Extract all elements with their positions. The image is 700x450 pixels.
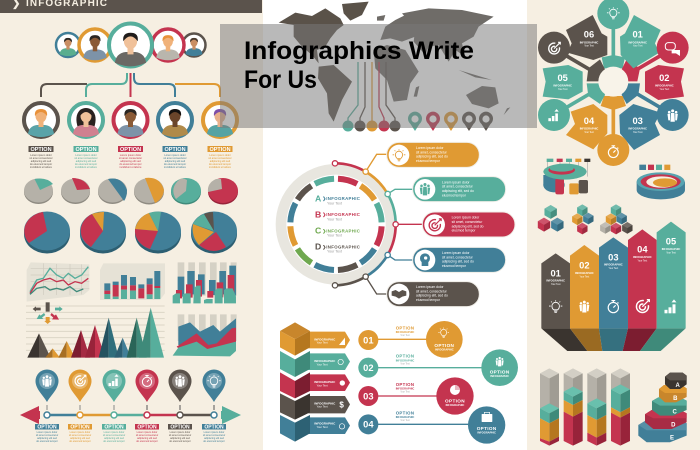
portrait: orange ring — [203, 103, 237, 137]
petal 05 — [543, 65, 583, 99]
option 02: INFOGRAPHIC — [490, 374, 509, 378]
option labels row: OPTION — [75, 147, 97, 153]
option labels row: incididunt ut labore — [75, 165, 97, 169]
option 02: INFOGRAPHIC — [396, 358, 414, 362]
option labels row: Lorem ipsum dolor — [164, 153, 186, 157]
option 04 — [358, 406, 505, 444]
column two — [564, 368, 583, 446]
pill: red target: eiusmod tempor — [452, 229, 476, 233]
column 05: 05 — [666, 236, 676, 246]
timeline option labels: Lorem ipsum dolor — [70, 431, 91, 434]
petal 05: INFOGRAPHIC — [553, 84, 572, 88]
option labels row: adipiscing elit sed — [210, 159, 231, 163]
option 04: INFOGRAPHIC — [477, 430, 496, 434]
column 05: INFOGRAPHIC — [662, 247, 680, 251]
pill: blue head gear — [413, 247, 506, 272]
column 04: Your Text — [638, 259, 647, 262]
pill: teal people: Lorem ipsum dolor — [442, 180, 470, 184]
arrow tab: dark: $ — [339, 400, 344, 409]
timeline option labels: adipiscing elit sed — [204, 437, 224, 440]
title overlay banner — [220, 24, 537, 128]
pill: blue head gear: adipiscing elit, sed do — [442, 260, 474, 264]
petal 02 — [645, 65, 684, 100]
timeline option labels: Lorem ipsum dolor — [37, 431, 58, 434]
centre labels A-D: C — [315, 226, 322, 236]
petal 06: INFOGRAPHIC — [580, 40, 598, 44]
option labels row: do eiusmod tempor — [30, 162, 52, 166]
arrow tab: orange: INFOGRAPHIC — [314, 337, 336, 341]
arc nodes — [332, 161, 398, 288]
option labels row: OPTION — [209, 147, 231, 153]
pill: orange bulb: sit amet, consectetur — [416, 150, 448, 154]
option labels row: incididunt ut labore — [120, 165, 142, 169]
column 01: 01 — [550, 268, 561, 278]
petal 04: Your Text — [584, 131, 594, 134]
column four — [611, 368, 630, 446]
option labels row: do eiusmod tempor — [209, 162, 231, 166]
option labels row — [28, 146, 232, 169]
option labels row: OPTION — [30, 147, 52, 153]
org chart connectors — [41, 73, 220, 97]
column 03: 03 — [608, 252, 619, 262]
option labels row: sit amet consectetur — [74, 156, 98, 160]
column 01: INFOGRAPHIC — [546, 279, 565, 283]
option 04: 04 — [363, 420, 374, 430]
pill: red target: sit amet, consectetur — [452, 220, 483, 224]
centre labels A-D: Your Text — [327, 201, 342, 205]
stacked bar chart — [100, 263, 165, 300]
map connector lines — [348, 62, 395, 124]
pill: teal people — [413, 177, 506, 202]
option labels row: incididunt ut labore — [209, 165, 231, 169]
centre labels A-D: Your Text — [327, 250, 342, 254]
timeline option labels: adipiscing elit sed — [70, 437, 90, 440]
petal 01 — [620, 15, 661, 68]
timeline option labels: do eiusmod tempor — [136, 440, 158, 443]
portrait: dark ring — [24, 103, 58, 137]
arrow tab: red — [308, 374, 350, 391]
arrow tab: orange: Your Text — [317, 341, 328, 345]
cube stack with options — [280, 321, 518, 444]
option labels row: adipiscing elit sed — [31, 159, 52, 163]
option 03: INFOGRAPHIC — [396, 387, 414, 391]
arrow tab: dark: INFOGRAPHIC — [314, 401, 336, 405]
option labels row: OPTION — [120, 147, 141, 153]
option labels row: incididunt ut labore — [164, 165, 186, 169]
petal 01: 01 — [632, 30, 643, 40]
centre labels A-D: ❯INFOGRAPHIC — [322, 228, 360, 234]
outer coloured arcs — [335, 163, 396, 285]
map hexagon markers — [342, 120, 400, 132]
centre labels A-D: B — [315, 209, 321, 219]
timeline option labels: do eiusmod tempor — [103, 440, 125, 443]
petal 06: 06 — [584, 30, 594, 40]
column base perspective — [541, 328, 686, 351]
pill: teal people: sit amet, consectetur — [442, 185, 474, 189]
timeline option labels: OPTION — [204, 424, 224, 430]
map pins — [408, 112, 493, 131]
3D ring chart left — [543, 159, 590, 194]
option labels row: Lorem ipsum dolor — [120, 153, 141, 157]
petal 01: Your Text — [633, 45, 643, 48]
pill: orange bulb: adipiscing elit, sed do — [416, 155, 448, 159]
layer B: B — [673, 396, 678, 402]
petal 04: 04 — [584, 116, 595, 126]
timeline option labels: do eiusmod tempor — [69, 440, 91, 443]
option 02: Your Text — [400, 362, 410, 365]
option 01: Your Text — [400, 334, 410, 337]
small arrows cluster — [33, 302, 63, 324]
arrow tab: teal: INFOGRAPHIC — [314, 359, 336, 363]
pill: orange bulb: Lorem ipsum dolor — [416, 146, 444, 150]
timeline option labels: do eiusmod tempor — [169, 440, 191, 443]
world map — [279, 2, 510, 122]
hexagon flower diagram — [538, 0, 689, 199]
flower stems — [565, 27, 662, 137]
option labels row: sit amet consectetur — [119, 156, 142, 160]
arrow tab: red: Your Text — [317, 383, 328, 387]
arrow tab: dark — [308, 396, 350, 413]
option 01: OPTION — [396, 325, 414, 330]
connector lines to pills — [366, 154, 422, 294]
arrow tab: teal — [308, 353, 350, 370]
option 04: INFOGRAPHIC — [396, 415, 414, 419]
pill: blue head gear: sit amet, consectetur — [442, 255, 474, 259]
timeline option labels: adipiscing elit sed — [104, 437, 124, 440]
centre labels A-D: Your Text — [327, 217, 342, 221]
option labels row: sit amet consectetur — [29, 156, 53, 160]
timeline option labels: Lorem ipsum dolor — [137, 431, 158, 434]
pill: blue head gear: Lorem ipsum dolor — [442, 251, 470, 255]
timeline option labels: sit amet consectetur — [203, 434, 225, 437]
timeline option labels: sit amet consectetur — [36, 434, 58, 437]
option labels row: OPTION — [164, 147, 186, 153]
option 04: OPTION — [477, 426, 497, 431]
timeline option labels: adipiscing elit sed — [137, 437, 157, 440]
petal 06 — [566, 15, 607, 60]
option 02 — [358, 349, 518, 386]
option 04: Your Text — [400, 419, 410, 422]
option 03: INFOGRAPHIC — [446, 403, 464, 407]
outer icon circles — [538, 0, 689, 166]
centre circle — [598, 67, 628, 97]
centre labels A-D: Your Text — [327, 234, 342, 238]
option 02: OPTION — [396, 354, 414, 359]
option 02: OPTION — [490, 370, 510, 375]
pill: dark handshake: adipiscing elit, sed do — [416, 294, 448, 298]
title: Infographics Write — [244, 37, 474, 65]
centre labels A-D: ❯INFOGRAPHIC — [322, 244, 360, 250]
circular diagram — [273, 142, 515, 307]
arrow tab: dark: Your Text — [317, 405, 328, 409]
petal 05: 05 — [557, 73, 568, 83]
column 04 — [628, 229, 657, 328]
portrait: red ring — [114, 103, 148, 137]
column 05 — [657, 222, 686, 328]
option labels row: incididunt ut labore — [30, 165, 52, 169]
column 04: INFOGRAPHIC — [633, 255, 652, 259]
pill: dark handshake: Lorem ipsum dolor — [416, 285, 444, 289]
option labels row: Lorem ipsum dolor — [209, 153, 231, 157]
option 01: INFOGRAPHIC — [435, 347, 454, 351]
centre labels A-D — [315, 193, 360, 254]
arrow tab: red: INFOGRAPHIC — [314, 380, 336, 384]
cube clusters — [538, 204, 633, 234]
line chart — [27, 262, 89, 302]
option 03: OPTION — [396, 382, 414, 387]
mountain peak chart — [26, 306, 165, 358]
arrow tab: orange — [308, 332, 350, 348]
column 02: INFOGRAPHIC — [575, 271, 594, 275]
timeline option labels: sit amet consectetur — [136, 434, 158, 437]
option 01 — [358, 321, 463, 358]
option 04: OPTION — [396, 410, 414, 415]
layer C: C — [672, 409, 677, 415]
pill: red target: Lorem ipsum dolor — [452, 216, 480, 220]
option 03: Your Text — [400, 391, 410, 394]
small pie charts row — [24, 178, 238, 204]
column 02: 02 — [579, 260, 590, 270]
option labels row: sit amet consectetur — [208, 156, 232, 160]
petal 02: 02 — [659, 73, 670, 83]
timeline option labels: OPTION — [104, 424, 124, 430]
panel: centre white column — [263, 0, 527, 450]
option 01: 01 — [363, 335, 374, 345]
petal 04: INFOGRAPHIC — [580, 127, 598, 131]
timeline option labels: sit amet consectetur — [69, 434, 91, 437]
pill: dark handshake: sit amet, consectetur — [416, 289, 448, 293]
pill: dark handshake: eiusmod tempor — [416, 298, 441, 302]
petal 03: 03 — [632, 116, 643, 126]
option 01: INFOGRAPHIC — [396, 330, 414, 334]
large pie charts row — [24, 212, 237, 254]
column 03 — [599, 237, 628, 328]
3D bar chart — [173, 262, 237, 303]
timeline option labels: do eiusmod tempor — [36, 440, 58, 443]
petal 03: Your Text — [633, 131, 643, 134]
centre labels A-D: D — [315, 242, 321, 252]
option labels row: sit amet consectetur — [163, 156, 187, 160]
option 01: OPTION — [434, 343, 455, 348]
pill: red target: adipiscing elit, sed do — [452, 224, 484, 228]
inner dashed ring — [273, 161, 399, 287]
pill: orange bulb — [387, 142, 479, 167]
pill: teal people: adipiscing elit, sed do — [442, 189, 474, 193]
column 05: Your Text — [666, 251, 676, 254]
portrait: teal ring — [69, 103, 103, 137]
panel: right column — [538, 0, 689, 446]
petal 03: INFOGRAPHIC — [628, 127, 647, 131]
option labels row: adipiscing elit sed — [120, 159, 141, 163]
column 02 — [570, 245, 599, 328]
option labels row: adipiscing elit sed — [76, 159, 97, 163]
timeline option labels: OPTION — [37, 424, 57, 430]
timeline option labels: do eiusmod tempor — [203, 440, 225, 443]
column 02: Your Text — [580, 275, 589, 278]
option labels row: do eiusmod tempor — [119, 162, 142, 166]
petal 05: Your Text — [558, 88, 568, 91]
petal 04 — [566, 104, 607, 149]
centre labels A-D: ❯INFOGRAPHIC — [322, 196, 360, 202]
layer E: E — [670, 436, 674, 442]
pill: dark handshake — [387, 282, 479, 307]
arrow tab: blue — [308, 417, 350, 434]
arrow tab: blue: Your Text — [317, 425, 328, 429]
isometric stacked columns — [540, 368, 630, 446]
option 03: 03 — [363, 391, 374, 401]
option labels row: Lorem ipsum dolor — [75, 153, 97, 157]
timeline option labels — [35, 424, 226, 443]
centre labels A-D: ❯INFOGRAPHIC — [322, 212, 360, 218]
option labels row: Lorem ipsum dolor — [30, 153, 52, 157]
layer D: D — [671, 422, 676, 428]
pill: blue head gear: eiusmod tempor — [442, 264, 467, 268]
timeline arrows and nodes — [20, 405, 241, 424]
petal 02: Your Text — [660, 88, 669, 91]
pill: red target — [422, 212, 515, 237]
column 03: INFOGRAPHIC — [604, 263, 623, 267]
petal 06: Your Text — [584, 45, 594, 48]
column 04: 04 — [637, 244, 648, 254]
timeline option labels: sit amet consectetur — [169, 434, 191, 437]
petal 01: INFOGRAPHIC — [628, 40, 647, 44]
option 02: 02 — [363, 363, 374, 373]
centre labels A-D: A — [315, 193, 322, 203]
layer A: A — [675, 383, 680, 389]
title: For Us — [244, 66, 317, 94]
column 01: Your Text — [551, 283, 561, 286]
inner ring segments — [587, 55, 640, 110]
timeline option labels: OPTION — [170, 424, 190, 430]
column one — [540, 368, 559, 446]
arrow tab: teal: Your Text — [317, 362, 328, 366]
isometric cube layers — [280, 322, 310, 442]
3D area chart — [173, 314, 237, 356]
title — [244, 37, 474, 94]
timeline option labels: OPTION — [70, 424, 90, 430]
timeline option labels: adipiscing elit sed — [37, 437, 57, 440]
3D ring chart right — [637, 165, 685, 199]
option labels row: do eiusmod tempor — [75, 162, 97, 166]
option 03 — [358, 377, 474, 415]
timeline option labels: Lorem ipsum dolor — [170, 431, 191, 434]
petal 03 — [619, 104, 661, 150]
column three — [587, 368, 606, 446]
petal 02: INFOGRAPHIC — [655, 84, 674, 88]
timeline option labels: sit amet consectetur — [103, 434, 125, 437]
option labels row: do eiusmod tempor — [164, 162, 186, 166]
arrow tab: blue: INFOGRAPHIC — [314, 422, 336, 426]
column 01 — [541, 253, 570, 328]
option 03: OPTION — [445, 399, 465, 404]
pill: teal people: eiusmod tempor — [442, 193, 467, 197]
header bar — [0, 0, 262, 13]
panel: people, pies and charts — [0, 0, 262, 443]
team portrait row — [56, 24, 206, 66]
hexagonal step pyramid A-E — [638, 373, 687, 442]
portrait: blue ring — [158, 103, 192, 137]
timeline option labels: Lorem ipsum dolor — [204, 431, 225, 434]
arrow columns 01-05 — [541, 222, 686, 351]
timeline option labels: adipiscing elit sed — [170, 437, 190, 440]
pill: orange bulb: eiusmod tempor — [416, 159, 441, 163]
timeline option labels: Lorem ipsum dolor — [104, 431, 125, 434]
timeline option labels: OPTION — [137, 424, 157, 430]
option labels row: adipiscing elit sed — [165, 159, 186, 163]
timeline map pins — [36, 370, 226, 402]
column 03: Your Text — [609, 267, 618, 270]
